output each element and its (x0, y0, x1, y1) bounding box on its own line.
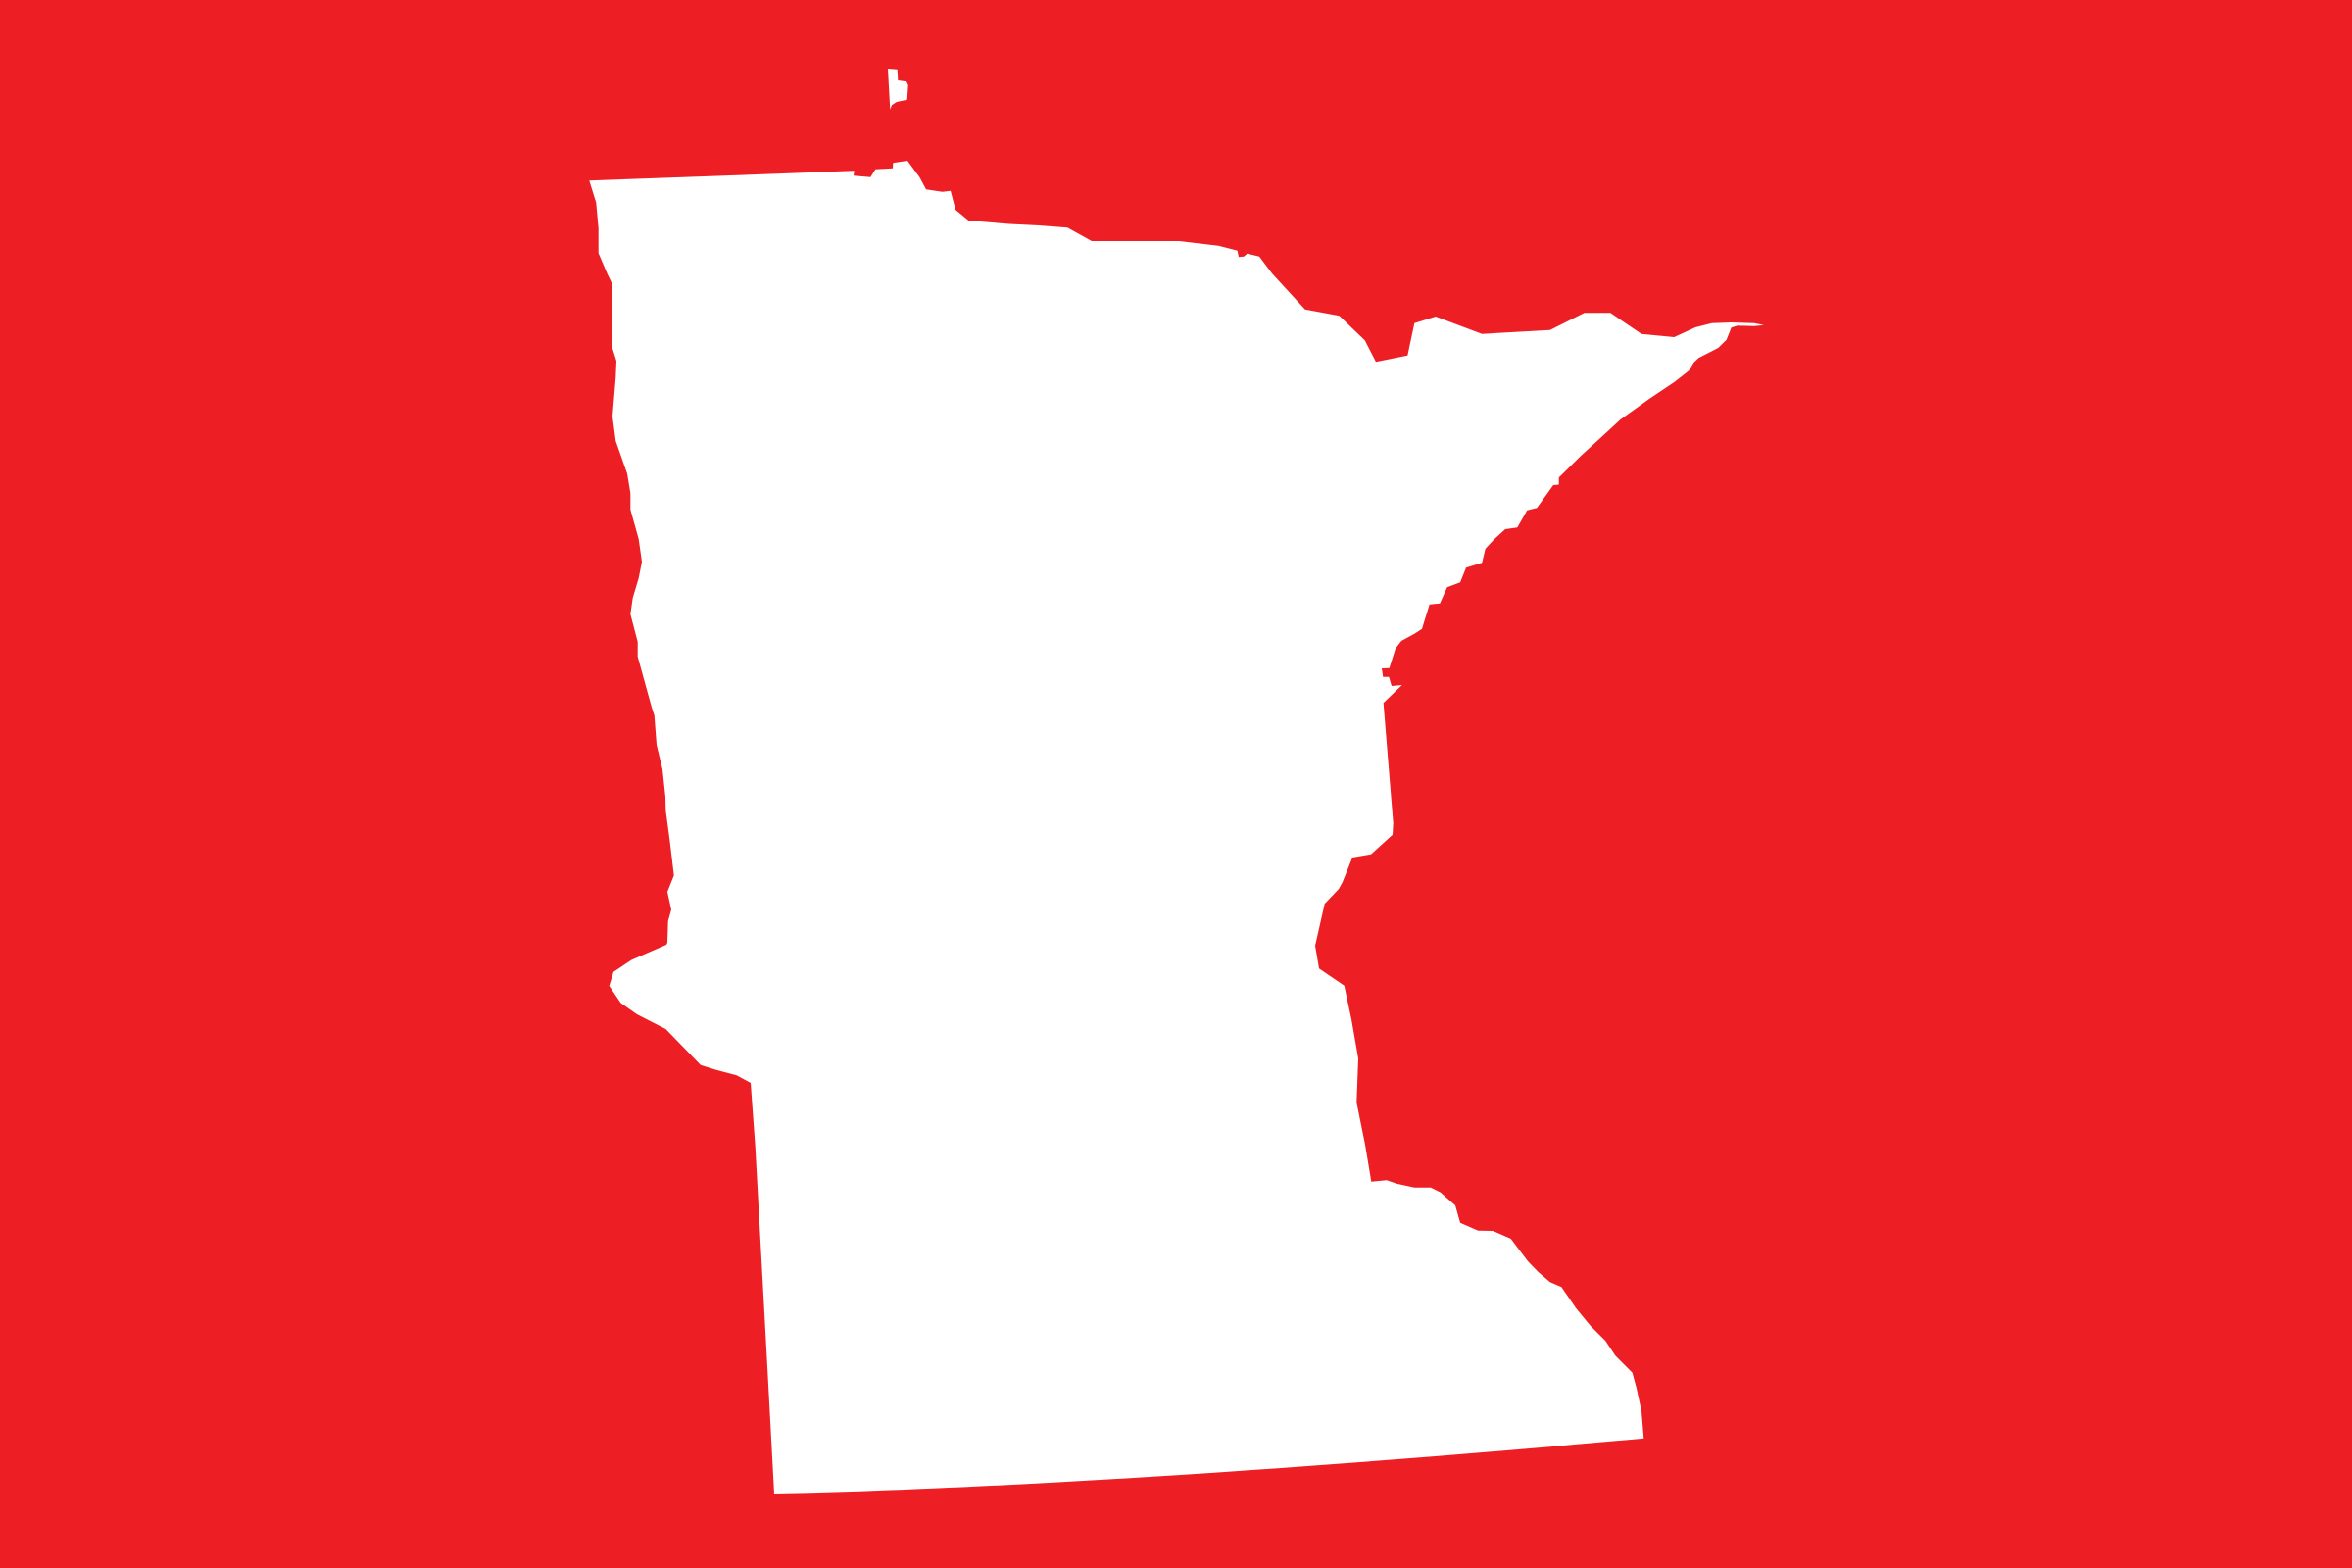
icon: Minnesota state shape (589, 69, 1764, 1494)
Northwest Angle (888, 69, 908, 110)
state mainland (589, 161, 1764, 1494)
